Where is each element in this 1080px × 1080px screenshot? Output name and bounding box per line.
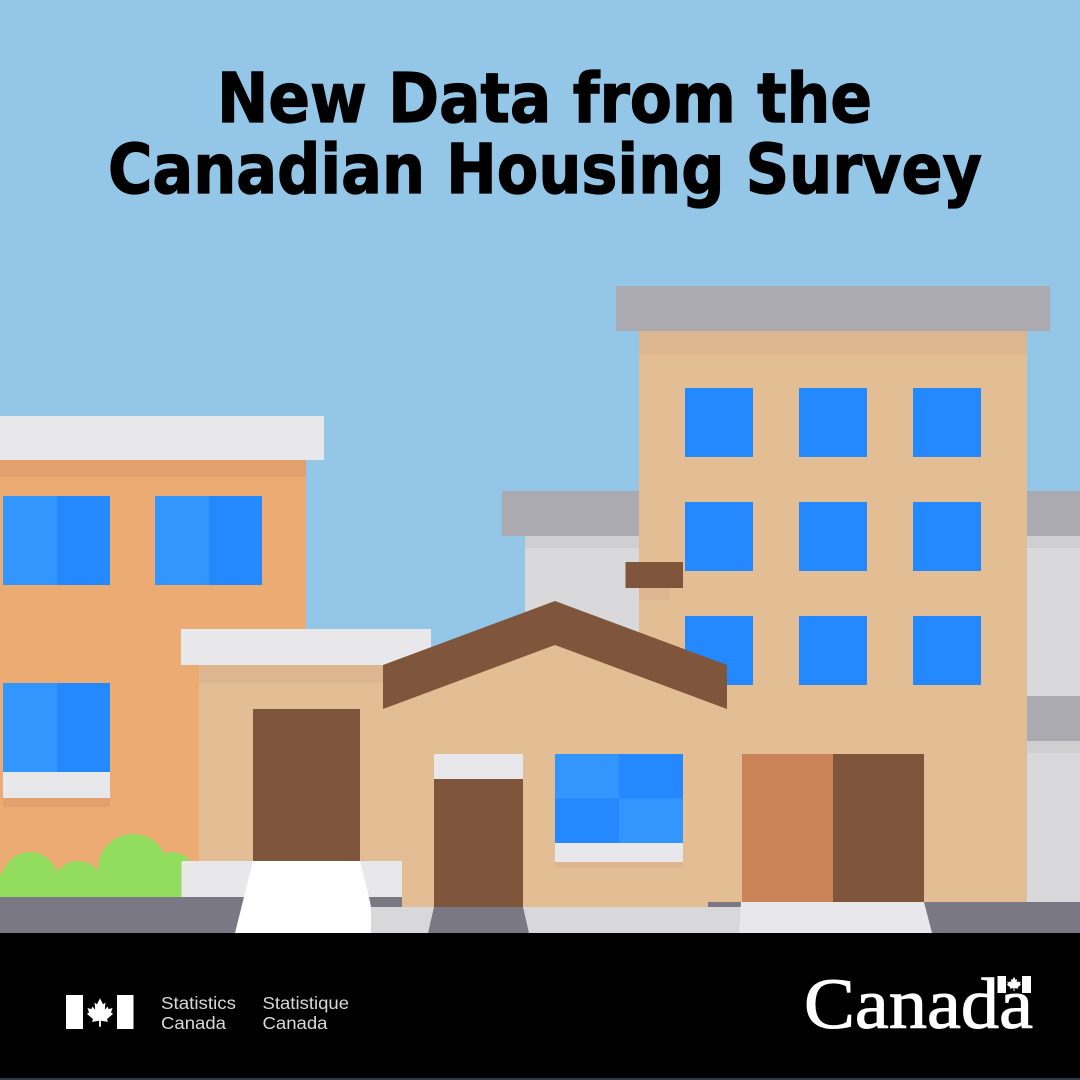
black footer band	[0, 933, 1080, 1080]
grey background building	[502, 491, 1080, 906]
orange building roof	[0, 416, 324, 460]
bottom edge line	[0, 1078, 1080, 1080]
title	[108, 59, 982, 210]
centre house window	[555, 754, 683, 868]
title: Canadian Housing Survey	[108, 130, 982, 210]
Statistics Canada English name: Canada	[161, 1013, 226, 1033]
Statistique Canada French name: Canada	[262, 1013, 328, 1033]
small house door	[253, 709, 360, 861]
centre house	[383, 601, 742, 907]
front steps left	[182, 861, 402, 933]
orange building windows	[3, 496, 262, 807]
tall building roof	[616, 286, 1050, 331]
chimney	[626, 562, 683, 600]
street and sidewalk	[0, 897, 1080, 933]
centre house pitched roof	[383, 601, 727, 709]
double door	[742, 754, 924, 903]
wordmark flag	[998, 976, 1031, 993]
Canada wordmark: Canada	[804, 964, 1033, 1044]
green bushes	[0, 834, 195, 911]
Statistics Canada English name: Statistics	[161, 993, 236, 1013]
tall building windows	[685, 388, 981, 685]
title: New Data from the	[217, 59, 872, 139]
Statistique Canada French name: Statistique	[262, 993, 349, 1013]
centre house door	[434, 754, 523, 907]
Statistics Canada flag symbol	[66, 995, 134, 1029]
orange building left	[0, 416, 324, 900]
small house roof	[181, 629, 431, 665]
tall apartment building	[616, 286, 1050, 906]
small house with door	[181, 629, 431, 905]
front step right	[739, 902, 932, 933]
